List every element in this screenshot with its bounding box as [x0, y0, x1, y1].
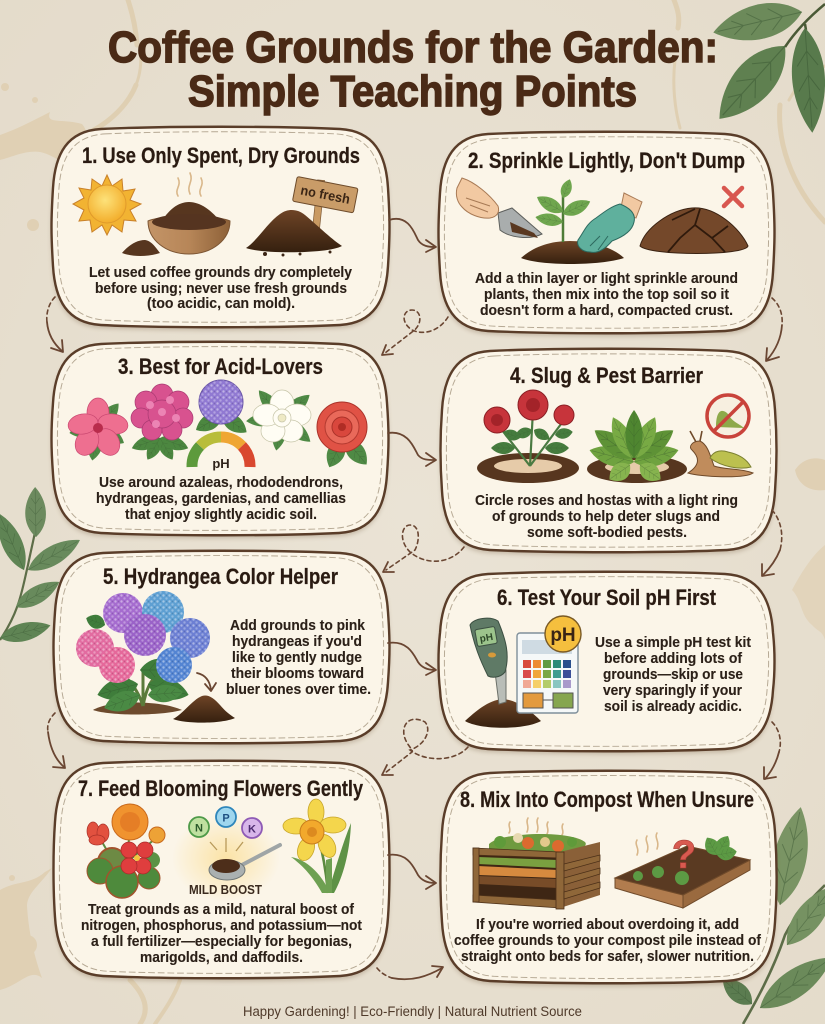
body text 5: like to gently nudge	[232, 650, 362, 666]
body text 1: (too acidic, can mold).	[147, 296, 295, 312]
heading 8: 8. Mix Into Compost When Unsure	[460, 787, 754, 812]
body text 8: If you're worried about overdoing it, add	[476, 917, 739, 933]
panel 7: Feed Blooming Flowers Gently	[54, 761, 390, 981]
arrow: 6 to 8	[764, 722, 780, 779]
arrow: 1 to 3	[47, 297, 63, 352]
icon: raised bed with question mark	[615, 832, 750, 908]
body text 2: doesn't form a hard, compacted crust.	[480, 303, 733, 319]
body text 7	[81, 902, 362, 966]
body text 6: very sparingly if your	[603, 683, 742, 699]
title: Simple Teaching Points	[188, 67, 637, 116]
icon: seedling in soil	[521, 177, 624, 264]
icon: pH badge	[545, 616, 581, 652]
arrow: 7 to 8 top	[388, 855, 436, 889]
icon: red x	[724, 188, 742, 206]
icon: begonia and marigolds	[87, 804, 165, 898]
body text 1: before using; never use fresh grounds	[95, 281, 347, 297]
panel 5: Hydrangea Color Helper	[54, 551, 390, 746]
decorative leaves: top right branch	[705, 0, 825, 134]
body text 5: bluer tones over time.	[226, 682, 371, 698]
icon: hosta with ring of grounds	[587, 410, 687, 486]
panel 1: Use Only Spent, Dry Grounds	[52, 127, 390, 330]
icon: pile with no fresh sign	[246, 177, 358, 256]
body text 6	[595, 635, 751, 715]
icon: bowl of grounds	[148, 173, 230, 254]
icon: camellia	[317, 402, 373, 471]
decorative leaves: left branch	[0, 487, 85, 647]
body text 6: Use a simple pH test kit	[595, 635, 751, 651]
body text 6: before adding lots of	[604, 651, 742, 667]
body text 6: soil is already acidic.	[604, 699, 742, 715]
icon: compacted crust mound	[640, 208, 748, 254]
body text 1	[89, 265, 353, 312]
body text 8: straight onto beds for safer, slower nutrition.	[461, 949, 754, 965]
body text 3	[96, 475, 346, 523]
icon: roses with ring of grounds	[477, 390, 579, 483]
icon: soil with pH meter: pH	[479, 632, 494, 645]
gauge label: pH	[212, 456, 230, 471]
body text 4: some soft-bodied pests.	[527, 525, 687, 541]
body text 7: marigolds, and daffodils.	[140, 950, 303, 966]
icon: daffodil	[283, 799, 351, 893]
icon: purple hydrangea	[192, 380, 251, 439]
panel 8: Mix Into Compost When Unsure	[440, 771, 776, 986]
body text 2	[475, 271, 738, 319]
arrow: 4 to 6	[762, 510, 782, 576]
body text 7: Treat grounds as a mild, natural boost of	[88, 902, 354, 918]
body text 6: grounds—skip or use	[603, 667, 743, 683]
arrow: 3 to 4	[388, 433, 436, 466]
arrow: 4 to 5 looped	[383, 525, 464, 572]
icon: raised bed with question mark: ?	[672, 833, 696, 877]
panel 3: Best for Acid-Lovers	[52, 342, 388, 538]
icon: pH gauge	[192, 437, 250, 471]
body text 2: plants, then mix into the top soil so it	[484, 287, 729, 303]
icon: small pile	[122, 240, 160, 256]
arrow: 5 to 6	[388, 643, 436, 675]
icon: slug and caterpillar	[688, 431, 753, 477]
heading 4: 4. Slug & Pest Barrier	[510, 363, 703, 388]
panel 4: Slug & Pest Barrier	[440, 349, 776, 555]
heading 3: 3. Best for Acid-Lovers	[118, 354, 323, 379]
icon: NPK boost spoon	[172, 807, 280, 902]
body text 5	[226, 618, 371, 698]
body text 4: Circle roses and hostas with a light ring	[475, 493, 738, 509]
icon: NPK boost spoon: K	[248, 824, 256, 836]
icon: hand with trowel	[456, 178, 542, 238]
body text 3: that enjoy slightly acidic soil.	[125, 507, 317, 523]
heading 1: 1. Use Only Spent, Dry Grounds	[82, 143, 360, 168]
body text 2: Add a thin layer or light sprinkle around	[475, 271, 738, 287]
arrow: 2 to 4	[766, 298, 782, 361]
icon: hydrangea bush	[76, 591, 210, 717]
body text 3: Use around azaleas, rhododendrons,	[99, 475, 343, 491]
icon: pile with no fresh sign: no fresh	[299, 183, 351, 207]
body text 5: their blooms toward	[231, 666, 364, 682]
title: Coffee Grounds for the Garden:	[108, 23, 718, 72]
body text 4	[475, 493, 738, 541]
heading 7: 7. Feed Blooming Flowers Gently	[78, 776, 364, 801]
footer: Happy Gardening! | Eco-Friendly | Natural Nutrient Source	[243, 1004, 582, 1019]
icon: sun	[73, 175, 141, 235]
title	[108, 23, 718, 116]
icon: arrow to grounds	[197, 673, 216, 691]
icon: rhododendron	[130, 384, 193, 463]
arrow: 5 to 7	[48, 713, 65, 768]
panel 6: Test Your Soil pH First	[438, 572, 774, 754]
body text 8: coffee grounds to your compost pile instead of	[454, 933, 761, 949]
icon: NPK boost spoon: N	[195, 822, 203, 834]
heading 6: 6. Test Your Soil pH First	[497, 585, 717, 610]
heading 5: 5. Hydrangea Color Helper	[103, 564, 338, 589]
icon: teal garden glove	[578, 193, 642, 252]
arrow: 7 to 8 bottom	[377, 966, 443, 979]
body text 1: Let used coffee grounds dry completely	[89, 265, 353, 281]
label: mild boost: MILD BOOST	[189, 882, 262, 897]
icon: gardenia	[246, 386, 315, 452]
body text 7: a full fertilizer—especially for begonias,	[91, 934, 352, 950]
icon: NPK boost spoon: P	[222, 812, 230, 824]
icon: no slugs sign	[707, 395, 749, 437]
icon: grounds pile	[173, 695, 235, 723]
icon: soil with pH meter	[465, 618, 541, 728]
body text 5: hydrangeas if you'd	[232, 634, 362, 650]
decorative leaves: bottom right branch	[717, 804, 825, 1024]
heading 2: 2. Sprinkle Lightly, Don't Dump	[468, 148, 745, 173]
panel 2: Sprinkle Lightly, Don't Dump	[438, 132, 774, 336]
icon: pH color chart	[517, 633, 578, 713]
body text 3: hydrangeas, gardenias, and camellias	[96, 491, 346, 507]
body text 7: nitrogen, phosphorus, and potassium—not	[81, 918, 362, 934]
arrow: 2 to 3 looped	[382, 310, 448, 355]
body text 8	[454, 917, 761, 965]
icon: compost crate	[473, 818, 600, 909]
icon: azalea	[66, 398, 130, 462]
icon: pH badge: pH	[550, 625, 576, 646]
arrow: 1 to 2	[389, 219, 436, 252]
body text 5: Add grounds to pink	[230, 618, 366, 634]
body text 4: of grounds to help deter slugs and	[492, 509, 720, 525]
arrow: 6 to 7 looped	[382, 719, 468, 775]
